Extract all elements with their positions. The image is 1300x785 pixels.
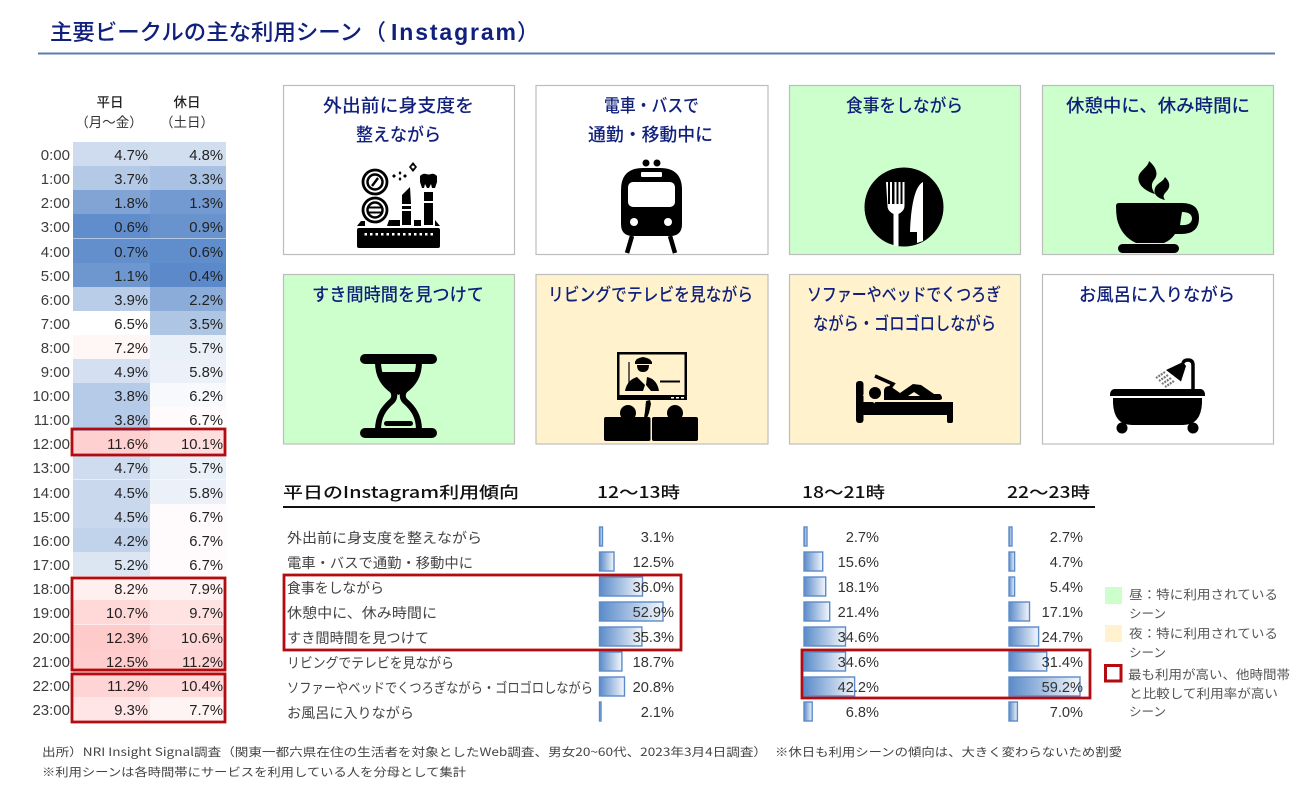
bar chart: 12-13: 36.0% [633, 580, 674, 596]
panel: during breaks: 休憩中に、休み時間に [1066, 92, 1250, 118]
bar chart: 12-13: 2.1% [641, 705, 674, 721]
bar chart: 12-13: 3.1% [641, 530, 674, 546]
highlight box: 22:00 to 23:00 [72, 674, 225, 722]
icon: bathtub with shower [1110, 360, 1205, 434]
heatmap weekend values: 0.6% [189, 245, 223, 261]
title [38, 15, 1275, 54]
panel: finding spare time [284, 274, 514, 444]
icon: coffee cup [1116, 161, 1199, 253]
panel: during breaks [1042, 86, 1274, 254]
panel: commuting: 通勤・移動中に [588, 121, 713, 147]
heatmap weekday values: 4.2% [114, 534, 148, 550]
heatmap weekend values: 6.7% [189, 534, 223, 550]
legend: highest usage: 最も利用が高い、他時間帯 [1128, 664, 1290, 683]
panel: finding spare time: すき間時間を見つけて [312, 281, 484, 307]
heatmap weekend values: 2.2% [189, 293, 223, 309]
heatmap hour labels: 13:00 [32, 460, 70, 477]
heatmap hour labels: 7:00 [41, 316, 70, 333]
heatmap weekday values: 1.8% [114, 196, 148, 212]
legend: midday [1105, 584, 1278, 622]
heatmap weekday values: 11.2% [107, 679, 148, 695]
heatmap hour labels: 3:00 [41, 219, 70, 236]
bar chart: 18-21: 15.6% [838, 555, 879, 571]
panel: living room TV: リビングでテレビを見ながら [548, 281, 753, 307]
panel: sofa or bed [790, 274, 1020, 444]
table scene labels: お風呂に入りながら [287, 703, 414, 723]
bar chart: 18-21: 34.6% [838, 630, 879, 646]
heatmap hour labels: 14:00 [32, 485, 70, 502]
heatmap weekend values: 5.8% [189, 486, 223, 502]
bar chart: 12-13: 18.7% [633, 655, 674, 671]
legend: night: シーン [1129, 642, 1166, 661]
heatmap weekday values: 0.7% [114, 245, 148, 261]
heatmap hour labels: 12:00 [32, 436, 70, 453]
panel: commuting [536, 86, 768, 254]
bar chart: 22-23: 5.4% [1050, 580, 1083, 596]
heatmap weekday values: 10.7% [106, 606, 148, 622]
table scene labels: 食事をしながら [287, 578, 384, 598]
heatmap hour labels [32, 147, 70, 719]
heatmap weekday values: 5.2% [114, 558, 148, 574]
bar chart: 22-23: 59.2% [1042, 680, 1083, 696]
heatmap weekend values: 7.9% [189, 582, 223, 598]
heatmap weekend values: 9.7% [189, 606, 223, 622]
heatmap weekend values: 4.8% [189, 148, 223, 164]
heatmap weekend values: 0.9% [189, 220, 223, 236]
panel: before going out: 外出前に身支度を [323, 92, 474, 118]
icon: person lying on bed [856, 376, 953, 423]
heatmap weekday values: 11.6% [107, 437, 148, 453]
bar chart: 12-13: 35.3% [633, 630, 674, 646]
heatmap cells [73, 142, 226, 722]
table scene labels: 電車・バスで通勤・移動中に [287, 553, 473, 573]
table header: 平日のInstagram利用傾向 [283, 479, 519, 503]
legend: highest usage: シーン [1129, 701, 1166, 720]
icon: watching television [604, 352, 698, 441]
heatmap weekday values: 3.8% [114, 413, 148, 429]
highlight box: midday scenes [284, 575, 681, 650]
bar chart: 22-23 [1009, 527, 1083, 721]
highlight box: 18:00 to 21:00 [72, 578, 225, 670]
heatmap hour labels: 15:00 [32, 509, 70, 526]
bar chart: 18-21: 18.1% [838, 580, 879, 596]
bar chart: 12-13: 20.8% [633, 680, 674, 696]
heatmap hour labels: 8:00 [41, 340, 70, 357]
heatmap weekend values: 5.7% [189, 341, 223, 357]
heatmap weekend values: 1.3% [189, 196, 223, 212]
legend: night: 夜：特に利用されている [1129, 623, 1278, 642]
table scene labels: 外出前に身支度を整えながら [287, 528, 482, 548]
heatmap weekday values: 3.8% [114, 389, 148, 405]
table header: 22～23時 [1007, 479, 1090, 503]
bar chart: 12-13: 12.5% [633, 555, 674, 571]
heatmap weekday values: 4.5% [114, 486, 148, 502]
heatmap: hourly usage rate [32, 91, 226, 722]
heatmap weekday values: 7.2% [114, 341, 148, 357]
heatmap weekend values: 3.5% [189, 317, 223, 333]
heatmap weekday values: 12.5% [106, 655, 148, 671]
heatmap weekend values: 3.3% [189, 172, 223, 188]
legend: night [1105, 623, 1278, 661]
heatmap weekend values: 6.7% [189, 413, 223, 429]
legend: highest usage [1106, 664, 1290, 720]
table scene labels: リビングでテレビを見ながら [287, 653, 454, 673]
heatmap weekend values: 6.7% [189, 558, 223, 574]
heatmap hour labels: 0:00 [41, 147, 70, 164]
footnote [42, 744, 1122, 780]
heatmap weekend values: 6.7% [189, 510, 223, 526]
heatmap column headers: （土日） [160, 111, 214, 131]
panel: bath [1042, 274, 1274, 444]
table scene labels [287, 528, 593, 723]
bar chart: 18-21: 42.2% [838, 680, 879, 696]
legend [1105, 584, 1290, 720]
heatmap weekend values: 10.1% [181, 437, 223, 453]
table header: 18～21時 [802, 479, 885, 503]
table header: 12～13時 [597, 479, 680, 503]
icon: hourglass [360, 354, 437, 438]
footnote: 出所）NRI Insight Signal調査（関東一都六県在住の生活者を対象としたWeb調査、男女20~60代、2023年3月4日調査） [42, 744, 767, 760]
icon: plate with fork and knife [864, 168, 944, 246]
heatmap weekend values [181, 148, 223, 719]
table: weekday Instagram usage trend [283, 479, 1095, 723]
heatmap weekend values: 5.7% [189, 461, 223, 477]
panel: commuting: 電車・バスで [604, 92, 699, 118]
heatmap weekday values: 4.9% [114, 365, 148, 381]
heatmap weekday values: 3.7% [114, 172, 148, 188]
bar chart: 18-21 [804, 527, 879, 721]
panel: before going out: 整えながら [356, 121, 441, 147]
heatmap weekday values: 4.5% [114, 510, 148, 526]
legend: highest usage: と比較して利用率が高い [1129, 683, 1278, 702]
table scene labels: すき間時間を見つけて [287, 628, 429, 648]
heatmap weekday values: 3.9% [114, 293, 148, 309]
heatmap hour labels: 6:00 [41, 292, 70, 309]
heatmap hour labels: 2:00 [41, 195, 70, 212]
bar chart: 22-23: 31.4% [1042, 655, 1083, 671]
heatmap weekend values: 7.7% [189, 703, 223, 719]
heatmap weekend values: 10.6% [181, 631, 223, 647]
heatmap weekday values: 6.5% [114, 317, 148, 333]
panel: living room TV [536, 274, 768, 444]
panel: bath: お風呂に入りながら [1079, 281, 1235, 307]
bar chart: 12-13: 52.9% [633, 605, 674, 621]
title: （ [364, 15, 386, 47]
heatmap hour labels: 1:00 [41, 171, 70, 188]
title: ） [517, 15, 539, 47]
bar chart: 22-23: 24.7% [1042, 630, 1083, 646]
heatmap weekday values: 0.6% [114, 220, 148, 236]
bar chart: 22-23: 17.1% [1042, 605, 1083, 621]
heatmap hour labels: 21:00 [32, 654, 70, 671]
heatmap weekend values: 5.8% [189, 365, 223, 381]
heatmap column headers: 平日 [96, 91, 124, 111]
icon: train [621, 160, 682, 253]
bar chart: 22-23: 7.0% [1050, 705, 1083, 721]
bar chart: 18-21: 21.4% [838, 605, 879, 621]
legend: midday: 昼：特に利用されている [1129, 584, 1278, 603]
title: 主要ビークルの主な利用シーン [50, 15, 362, 47]
heatmap weekday values: 9.3% [114, 703, 148, 719]
heatmap weekend values: 6.2% [189, 389, 223, 405]
highlight box: 12:00 [72, 429, 225, 455]
heatmap weekday values: 4.7% [114, 148, 148, 164]
table scene labels: 休憩中に、休み時間に [287, 603, 437, 623]
heatmap hour labels: 4:00 [41, 244, 70, 261]
heatmap hour labels: 17:00 [32, 557, 70, 574]
heatmap column headers: （月～金） [75, 111, 143, 131]
heatmap weekend values: 10.4% [181, 679, 223, 695]
heatmap column headers: 休日 [174, 91, 200, 111]
bar chart: 22-23: 4.7% [1050, 555, 1083, 571]
footnote: ※利用シーンは各時間帯にサービスを利用している人を分母として集計 [42, 764, 467, 780]
bar chart: 12-13 [600, 527, 674, 721]
heatmap hour labels: 9:00 [41, 364, 70, 381]
heatmap weekend values: 11.2% [182, 655, 223, 671]
heatmap hour labels: 10:00 [32, 388, 70, 405]
panel: while eating [790, 86, 1020, 254]
heatmap column headers [75, 91, 214, 131]
bar chart: 18-21: 2.7% [846, 530, 879, 546]
panel: while eating: 食事をしながら [846, 92, 963, 118]
icon: cosmetics [357, 162, 440, 248]
panel: sofa or bed: ソファーやベッドでくつろぎ [807, 281, 1001, 307]
heatmap hour labels: 18:00 [32, 581, 70, 598]
table header [283, 479, 1095, 508]
panel: sofa or bed: ながら・ゴロゴロしながら [813, 310, 996, 336]
heatmap hour labels: 5:00 [41, 268, 70, 285]
bar chart: 18-21: 34.6% [838, 655, 879, 671]
table scene labels: ソファーやベッドでくつろぎながら・ゴロゴロしながら [287, 678, 593, 698]
footnote: ※休日も利用シーンの傾向は、大きく変わらないため割愛 [775, 744, 1122, 760]
heatmap hour labels: 11:00 [34, 412, 70, 429]
panel: before going out [284, 86, 514, 254]
heatmap weekday values: 8.2% [114, 582, 148, 598]
bar chart: 18-21: 6.8% [846, 705, 879, 721]
bar chart: 22-23: 2.7% [1050, 530, 1083, 546]
heatmap weekend values: 0.4% [189, 269, 223, 285]
heatmap weekday values: 1.1% [114, 269, 148, 285]
heatmap hour labels: 23:00 [32, 702, 70, 719]
highlight box: evening scenes [802, 650, 1090, 698]
heatmap weekday values: 4.7% [114, 461, 148, 477]
title: Instagram [391, 19, 516, 45]
heatmap hour labels: 20:00 [32, 630, 70, 647]
heatmap hour labels: 19:00 [32, 605, 70, 622]
heatmap weekday values [106, 148, 148, 719]
heatmap hour labels: 16:00 [32, 533, 70, 550]
heatmap hour labels: 22:00 [32, 678, 70, 695]
heatmap weekday values: 12.3% [106, 631, 148, 647]
legend: midday: シーン [1129, 603, 1166, 622]
